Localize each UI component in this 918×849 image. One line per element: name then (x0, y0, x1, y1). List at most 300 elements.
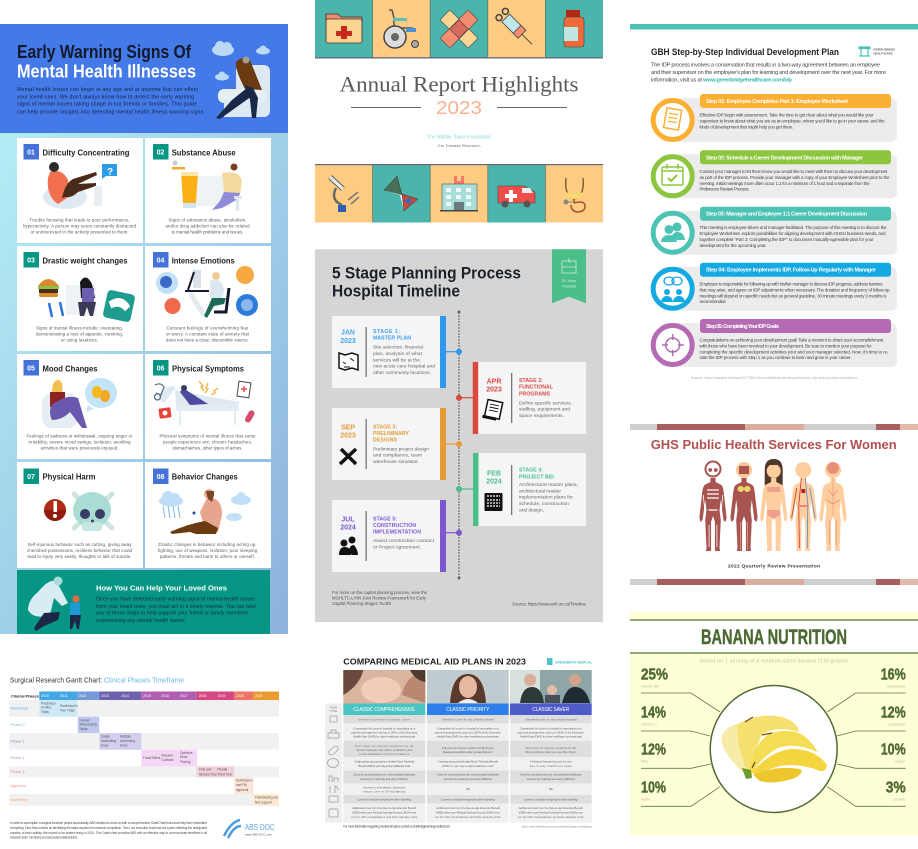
row text: Guaranteed full cover in hospital for specialists on a (437, 726, 499, 730)
icon: doctor and child (28, 576, 81, 631)
phase 0 row: Human (80, 718, 90, 722)
title: Early Warning Signs Of (17, 41, 192, 62)
icon: person in armchair with clouds (212, 41, 270, 119)
card 01 (17, 138, 143, 243)
stat: fiber: 12% (641, 741, 666, 758)
figure: nervous system (819, 462, 847, 551)
title: GHS Public Health Services For Women (651, 437, 897, 452)
icon: warning and skull (44, 492, 112, 531)
phase 0 row (10, 717, 99, 733)
step 1: supervisor to know about what you are as an employee, where you'd like to go in your career, and the (700, 118, 885, 124)
card 06: Physical symptoms of mental illness that some (160, 434, 256, 438)
step 4: Employee is responsible for following-up with his/her manager to discuss IDP progress, address barriers (700, 282, 883, 286)
stat: vitamin C (641, 705, 666, 727)
row text: Cover for comprehensive pre- and postnatal healthcare (353, 772, 416, 776)
icon: document (482, 399, 503, 421)
card 08 (145, 462, 271, 568)
step 3: Employee Worksheet, explore possibilities for aligning development with OHSU business needs, and (700, 231, 886, 236)
description: everything. First, they worked on identifying the tasks required for research completion. Then, our executive board set out a plan reflecting the anticipated (10, 826, 207, 830)
step 4: Step 04: Employee Implements IDP, Follow-Up Regularly with Manager (706, 268, 877, 274)
preclinical row: Trials (41, 710, 49, 714)
phase 3 row (10, 766, 234, 777)
stat: vitamin B6: vitamin B6 (641, 685, 659, 689)
footnote: For more information regarding medical aid plans contact us at info@greenbergmedical.com (343, 824, 451, 828)
step 3: development for the upcoming year. (700, 243, 766, 248)
phase 2 row: Contrast (162, 758, 174, 762)
row text: cancer cover in SA and abroad (363, 790, 406, 794)
top stripe (630, 424, 918, 430)
row text: Full cover for chronic medicine for all Chronic (442, 746, 494, 750)
stage 2 card: Define specific services, (519, 400, 572, 406)
phase 3 row: First and (199, 768, 212, 772)
stage 3 card: and compliance, team (373, 453, 422, 459)
row text: Chronic Disease List (CDL) conditions plus (356, 748, 413, 752)
stat: vitamin C: 14% (641, 705, 666, 722)
intro text: and their supervisor on the employee's plan for learning and development over the next year. For more (651, 70, 886, 76)
panel: surgical research gantt chart (9, 675, 279, 840)
bottom icon strip (315, 164, 603, 222)
stage 1 card: STAGE 1: (373, 329, 400, 335)
row text: Cover for medical emergencies when travelling (524, 798, 578, 802)
stat: vitamin C: vitamin C (641, 723, 657, 727)
logo: HEALTHCARE (874, 52, 893, 56)
card 01: or uninterested in the activity presented to them. (30, 230, 128, 234)
row text: N/A (466, 787, 470, 791)
stat: copper: 10% (881, 741, 906, 758)
logo (859, 47, 895, 56)
card 04: 04 (157, 258, 164, 265)
card 07 (17, 462, 143, 568)
title (17, 41, 196, 82)
card 07: lead to injury very easily, thoughts or talk of suicide. (28, 554, 132, 559)
row text: services for maternity and early childhood (444, 777, 492, 781)
intro text: Mental health issues can begin at any age and at anytime that can effect (17, 87, 199, 93)
approval row: approval (236, 788, 249, 792)
icon: construction workers (339, 536, 358, 555)
row text: (DEB) when your Medical Savings Account (MSA) runs (519, 810, 583, 814)
card 07: Self-injurious behavior such as cutting, giving away (28, 542, 132, 547)
approval row: Approval (10, 784, 26, 788)
stage 3 card: SEP (341, 424, 355, 431)
row text: Unlimited cover in any private hospital (442, 717, 494, 721)
stat: manganese: 16% (881, 666, 906, 683)
stage 4 card: STAGE 4: (519, 468, 543, 474)
step 4 (653, 263, 897, 311)
title (332, 264, 521, 301)
icon: bandage (440, 10, 478, 48)
stage 2 card (456, 362, 586, 434)
stat: protein: protein (894, 797, 906, 801)
row text: payment arrangement, and up to 180% of the Discovery (351, 730, 418, 734)
phase 2 row: Placebo (162, 754, 173, 758)
icon: man sitting in rain (159, 489, 251, 534)
foundation name: -For Disease Research- (437, 144, 482, 148)
callout: how you can help your loved ones (17, 570, 270, 634)
row text: Access to specialised, advanced (363, 786, 406, 790)
icon: DNA (384, 176, 418, 211)
stage 4 card: Architectural master plans, (519, 482, 578, 488)
stage 3 card: STAGE 3: (373, 425, 397, 431)
title: Surgical Research Gantt Chart: (10, 675, 102, 684)
stage 1 card: 2023 (340, 338, 356, 345)
source: Source: https://www.wrh.on.ca/Timeline (512, 602, 586, 607)
icon: crossed tools (340, 449, 356, 464)
description: research team members and associated stakeholders. (10, 836, 78, 840)
card 01: Trouble focusing that leads to poor performance, (30, 218, 130, 222)
comparison table (325, 715, 592, 823)
description (10, 821, 207, 840)
row text: services for maternity and early childhood (527, 777, 575, 781)
card 04 (145, 246, 271, 351)
foundation name (427, 134, 491, 148)
ribbon badge: Hospital (562, 284, 576, 288)
stage 5 card (332, 500, 462, 572)
year header: 2017 (180, 694, 188, 698)
figure: muscles (730, 462, 758, 551)
year header: 2013 (101, 694, 109, 698)
phase 1 row: Single (101, 734, 110, 738)
year header: 2012 (79, 694, 86, 698)
icon: map (339, 353, 358, 370)
card 05: 05 (27, 366, 35, 373)
card 08: Drastic changes in behavior including acting up, (158, 542, 256, 547)
row text: A savings account and limited Above Threshold Benefit (438, 760, 498, 764)
logo: ABS DOC: ABS DOC (245, 822, 275, 832)
year header: 2020 (236, 694, 244, 698)
source: Source: https://studylib.net/doc/11977867/ohsu-individual-development-plan--idp-step-by-step-instructions (691, 376, 857, 380)
card 07: Physical Harm (42, 472, 96, 481)
stat: copper: copper (894, 759, 906, 763)
icon: person at desk with emotion bubbles (156, 266, 258, 318)
row text: services for maternity and early childhood (360, 777, 409, 781)
row text: A high savings account and an unlimited Above Threshold (354, 760, 415, 764)
intro text: information, visit us at (651, 78, 702, 84)
card 04: does not have a clear, discernible source. (166, 338, 249, 342)
title: BANANA NUTRITION (701, 625, 847, 649)
row text: Full cover for chronic medicine for all (526, 746, 576, 750)
icon: syringe (495, 7, 537, 50)
row text: N/A (549, 787, 553, 791)
icon: patient on bed with medical items (154, 381, 256, 425)
stat: potassium: potassium (888, 723, 906, 727)
card 03: or using laxatives. (61, 338, 98, 342)
card 02: Substance Abuse (172, 148, 236, 157)
icon: beer and person (172, 160, 242, 211)
title: 5 Stage Planning Process (332, 264, 521, 282)
phase 0 row: Phase 0 (10, 723, 24, 727)
icon: target (662, 334, 684, 356)
footnote: For more on the capital planning process, view the (332, 590, 428, 595)
intro text: www.greenbridgehealthcare.com/idp (702, 78, 793, 84)
stage 4 card: schedule, construction (519, 501, 569, 507)
row text: A Medical Savings Account for your (530, 760, 572, 764)
stage 3 card: DESIGNS (373, 438, 398, 444)
row text: (DEB) when your Medical Savings Account (MSA) runs (436, 810, 500, 814)
row text (351, 717, 584, 819)
callout: how you can help your loved ones: How You Can Help Your Loved Ones (96, 584, 227, 593)
panel: GHS public health services for women (630, 424, 918, 585)
marketing row: Postmarketing and (255, 796, 278, 800)
stage 5 card: JUL (341, 516, 355, 523)
subtitle: 2022 Quarterly Review Presentation (728, 564, 820, 570)
icon: two people (661, 222, 685, 242)
card 07: cherished possessions, reckless behavior that could (27, 548, 133, 553)
preclinical row (10, 700, 78, 717)
phase 2 row: Optimize (180, 751, 193, 755)
phase 0 row: Study (80, 727, 88, 731)
card 03 (17, 246, 143, 351)
step 4: recommended. (700, 299, 726, 304)
stat: fiber: fiber (641, 759, 649, 763)
stage 5 card: CONSTRUCTION (373, 523, 416, 529)
row text: Health Rate (DHR) for other healthcare professionals (353, 734, 416, 738)
card 03: Signs of mental illness include: overeating, (36, 326, 123, 330)
phase 3 row: Third Trial (218, 772, 232, 776)
title: Mental Health Illnesses (17, 60, 196, 82)
step 5: start the IDP process with Step 1 as you continue to learn and grow in your career. (700, 355, 852, 360)
panel: annual report highlights (315, 0, 603, 222)
row text: Full cover for chronic medicine for all (355, 744, 414, 748)
stage 4 card: FEB (487, 470, 501, 477)
year header: 2014 (121, 694, 129, 698)
stage 4 card: PROJECT BID (519, 474, 554, 480)
row text: Disease List conditions when you see DoH prov. (443, 750, 493, 754)
card 01: 01 (27, 150, 35, 157)
card 05: Mood Changes (42, 364, 98, 373)
callout: how you can help your loved ones: from your loved ones, you must act in a timely manner. You can take (96, 604, 256, 610)
row text: CDL conditions when you see Med Xpert. (525, 750, 577, 754)
phase 3 row: Phase 3 (10, 770, 24, 774)
photo: smiling woman (427, 670, 509, 704)
figure: skeleton (699, 462, 727, 551)
row text: (ATB) for your day-to-day healthcare costs (442, 764, 494, 768)
logo: ABS DOC: www.ABS-DOC.com (245, 832, 273, 836)
card 02 (145, 138, 271, 243)
panel: comparing medical aid plans (325, 657, 593, 828)
preclinical row: Preclinical (41, 702, 56, 706)
stage 3 card: Preliminary project design (373, 446, 429, 452)
plan headers: CLASSIC SAVER (532, 707, 570, 713)
phase 1 row: Ascending (120, 739, 135, 743)
year header: 2010 (41, 694, 49, 698)
stage 2 card: 2023 (486, 387, 502, 394)
phase 2 row: Finding (180, 760, 191, 764)
phase 2 row: Fossil Effect (143, 756, 160, 760)
intro text: signs of mental issues taking shape in our friends or families. This guide (17, 102, 197, 108)
row icons (328, 716, 339, 817)
card 06: 06 (157, 366, 164, 373)
panel: banana nutrition (630, 612, 918, 835)
plan headers (325, 704, 592, 715)
plan headers: PLAN (330, 706, 337, 710)
stat: vitamin B6: 25% (641, 666, 668, 683)
title: Hospital Timeline (332, 283, 460, 301)
title: GBH Step-by-Step Individual Development Plan (651, 47, 839, 58)
year header: 2015 (143, 694, 151, 698)
stage 3 card: warehouse simulator. (373, 459, 419, 465)
panel: early warning signs of mental health illnesses (0, 24, 288, 634)
card 06: Physical Symptoms (172, 364, 245, 373)
stage 2 card: STAGE 2: (519, 378, 543, 384)
row text: out for GPs consultations and kids casualty visits (351, 815, 418, 819)
preclinical row: Vivo Trials (60, 708, 75, 712)
photo: family (510, 670, 592, 704)
card 05: Feelings of sadness or withdrawal, ongoing anger or (26, 434, 133, 438)
card 08: Behavior Changes (172, 472, 238, 481)
intro text: your loved ones. We don't always know how to detect the early warning (17, 94, 194, 100)
row text: extra additional chronic conditions (359, 752, 410, 756)
plan headers: CLASSIC COMPREHENSIVE (353, 707, 416, 713)
icon: hospital (440, 176, 478, 212)
stat: vitamin B6 (641, 666, 668, 689)
row text: Unlimited private hospital cover (358, 717, 410, 721)
stat: potassium (881, 705, 906, 727)
card 03: Drastic weight changes (42, 256, 128, 265)
banana illustration (710, 686, 837, 812)
step 5: with those who have been involved in your development. Be sure to mention your purpose for (700, 344, 872, 348)
card 06: people experience are: chronic headaches, (163, 440, 252, 444)
approval row: and FM (236, 783, 247, 787)
row text: Benefit (ATB) for your day-to-day healthcare costs (358, 764, 411, 768)
row text: (DEB) when your Medical Savings Account (MSA) runs (352, 810, 417, 814)
timeline axis (458, 310, 460, 580)
step 1: Effective IDP begin with assessment. Take the time to get clear about what you would like your (700, 112, 874, 118)
year header: 2011 (60, 694, 68, 698)
card 02: to mental health problems and issues. (172, 230, 244, 234)
intro text (17, 87, 205, 115)
card 04: Constant feelings of overwhelming fear (166, 326, 249, 330)
footnote: Capital Planning Stages Toolkit (332, 601, 392, 606)
phase 1 row (10, 733, 141, 750)
icon: calendar (484, 493, 502, 511)
marketing row: first support (255, 800, 272, 804)
footnote: MOHLTC-LHIN Joint Review Framework for Early (332, 596, 427, 600)
stage 3 card: 2023 (340, 433, 356, 440)
card 01: Difficulty Concentrating (42, 148, 130, 157)
row text: Guaranteed full cover in hospital for specialists on a (353, 726, 416, 730)
row text: Additional cover from the Day-to-day Extender Benefit (519, 806, 583, 810)
card 02: Signs of substance abuse, alcoholism, (168, 218, 246, 222)
step 2: Step 02: Schedule a Career Development Discussion with Manager (706, 155, 864, 161)
panel: hospital planning timeline (315, 249, 603, 622)
footnote: Source: https://www.discovery.co.za/medical-aid/compare-medical-plans (522, 826, 593, 828)
stage 4 card (456, 453, 586, 526)
card 08: patterns, threats and harm to others or oneself. (160, 554, 255, 559)
stat: protein: 3% (886, 780, 906, 797)
phase 3 row: Second Trial (199, 772, 217, 776)
row text: Cover for comprehensive pre- and postnatal healthcare (520, 772, 582, 776)
step 2 (653, 150, 897, 198)
row text: Cover for comprehensive pre- and postnatal healthcare (437, 772, 499, 776)
stage 1 card: Site selection, financial (373, 345, 423, 351)
year header: 2018 (199, 694, 206, 698)
stage 1 card: plan, analysis of what (373, 351, 423, 357)
phase 1 row: Dose (101, 744, 109, 748)
stat: biotin (641, 780, 666, 801)
row text: Cover for medical emergencies when travelling (441, 798, 495, 802)
approval row: Submission (236, 778, 253, 782)
callout: how you can help your loved ones: experiencing any mental health issues. (96, 618, 186, 624)
row text: Health Rate (DHR) for other healthcare professionals (520, 734, 582, 738)
stage 5 card: IMPLEMENTATION (373, 529, 421, 535)
stage 2 card: FUNCTIONAL (519, 385, 554, 391)
row text: day-to-day healthcare costs (530, 764, 572, 768)
stage 2 card: APR (487, 379, 501, 386)
callout: how you can help your loved ones: any of these steps to help support your friend or family members (96, 610, 248, 616)
step 5 (653, 319, 897, 367)
top icon strip (315, 0, 603, 58)
preclinical row: Preclinical (10, 706, 28, 710)
year: 2023 (436, 98, 482, 118)
row text: payment arrangement, and up to 180% of the Discovery (435, 730, 501, 734)
connector lines (641, 693, 906, 806)
logo: GREEN BRIDGE (874, 48, 895, 52)
stage 1 card (332, 316, 462, 388)
stat: manganese: manganese (886, 685, 906, 689)
figure: circulatory system (790, 462, 817, 551)
stage 2 card: space requirements. (519, 413, 564, 419)
card 04: Intense Emotions (172, 256, 235, 265)
logo: ABS DOC (224, 820, 275, 838)
card 07: 07 (27, 474, 35, 481)
plan headers: TYPE (330, 709, 337, 713)
foundation name: The Natalie Taylor Foundation (427, 134, 491, 140)
callout: how you can help your loved ones: Once you have detected early warning signs of mental health issues (96, 596, 255, 602)
stat: fiber (641, 741, 666, 763)
year header (39, 692, 279, 700)
stat: potassium: 12% (881, 705, 906, 722)
stage 3 card (332, 408, 462, 480)
icon: microscope (330, 177, 359, 212)
intro text: The IDP process involves a conservation that results in a two-way agreement between an employee (651, 62, 880, 68)
card 02: and/or drug addiction can also be related (166, 224, 250, 228)
icon: stethoscope (564, 178, 585, 212)
row text: Cover for medical emergencies when travelling (357, 798, 412, 802)
card 05: activities that were previously enjoyed. (40, 446, 118, 450)
step 2: Preference Review Process. (700, 186, 750, 192)
photo: family with baby (343, 670, 425, 704)
row text: out for GPs consultations and kids casualty visits (435, 815, 501, 819)
row text: Additional cover from the Day-to-day Extender Benefit (436, 806, 500, 810)
card 04: or worry. A constant state of anxiety that (166, 332, 250, 336)
phase 1 row: Phase 1 (10, 740, 24, 744)
card 08: 08 (157, 474, 164, 481)
card 01: hyperactivity. A person may seem constantly distracted (23, 224, 137, 228)
intro text: can help provide insights into detecting mental health illness warning signs. (17, 109, 205, 115)
stage 2 card: PROGRAMS (519, 391, 551, 397)
stage 5 card: or Project Agreement. (373, 544, 421, 550)
row text: Guaranteed full cover in hospital for specialists on a (520, 726, 582, 730)
stage 1 card: other community locations. (373, 370, 431, 376)
marketing row: Marketing (10, 798, 27, 802)
stage 1 card: new acute care hospital and (373, 364, 435, 370)
footnote (343, 824, 593, 828)
description: duration of each activity. We expect to be started ready in 2020. This Gantt chart provides ABS with an effective way to communicate timelines to all (10, 831, 207, 835)
card 03: 03 (27, 258, 35, 265)
card 03: demonstrating a loss of appetite, vomiting, (36, 332, 123, 336)
icon: woman with masks bubble (42, 378, 117, 428)
phase 1 row: Ascending (101, 739, 116, 743)
step 5: completing the specific development activities your and your manager selected. Now, it's time to re- (700, 350, 889, 354)
step 3: Step 03: Manager and Employee 1:1 Career Development Discussion (706, 212, 868, 218)
step 2: meeting. Initial meetings more often occur 1:1 for a minimum of 1 hour and a separate from the (700, 181, 870, 186)
icon: distracted person: ? (107, 167, 113, 178)
phase 0 row: Microdosing (80, 723, 97, 727)
stage 4 card: implementation plans for (519, 495, 573, 501)
stat: biotin: biotin (641, 797, 650, 801)
stat: biotin: 10% (641, 780, 666, 797)
step 5: Step 05: Completing Your IDP Goals (706, 324, 779, 330)
